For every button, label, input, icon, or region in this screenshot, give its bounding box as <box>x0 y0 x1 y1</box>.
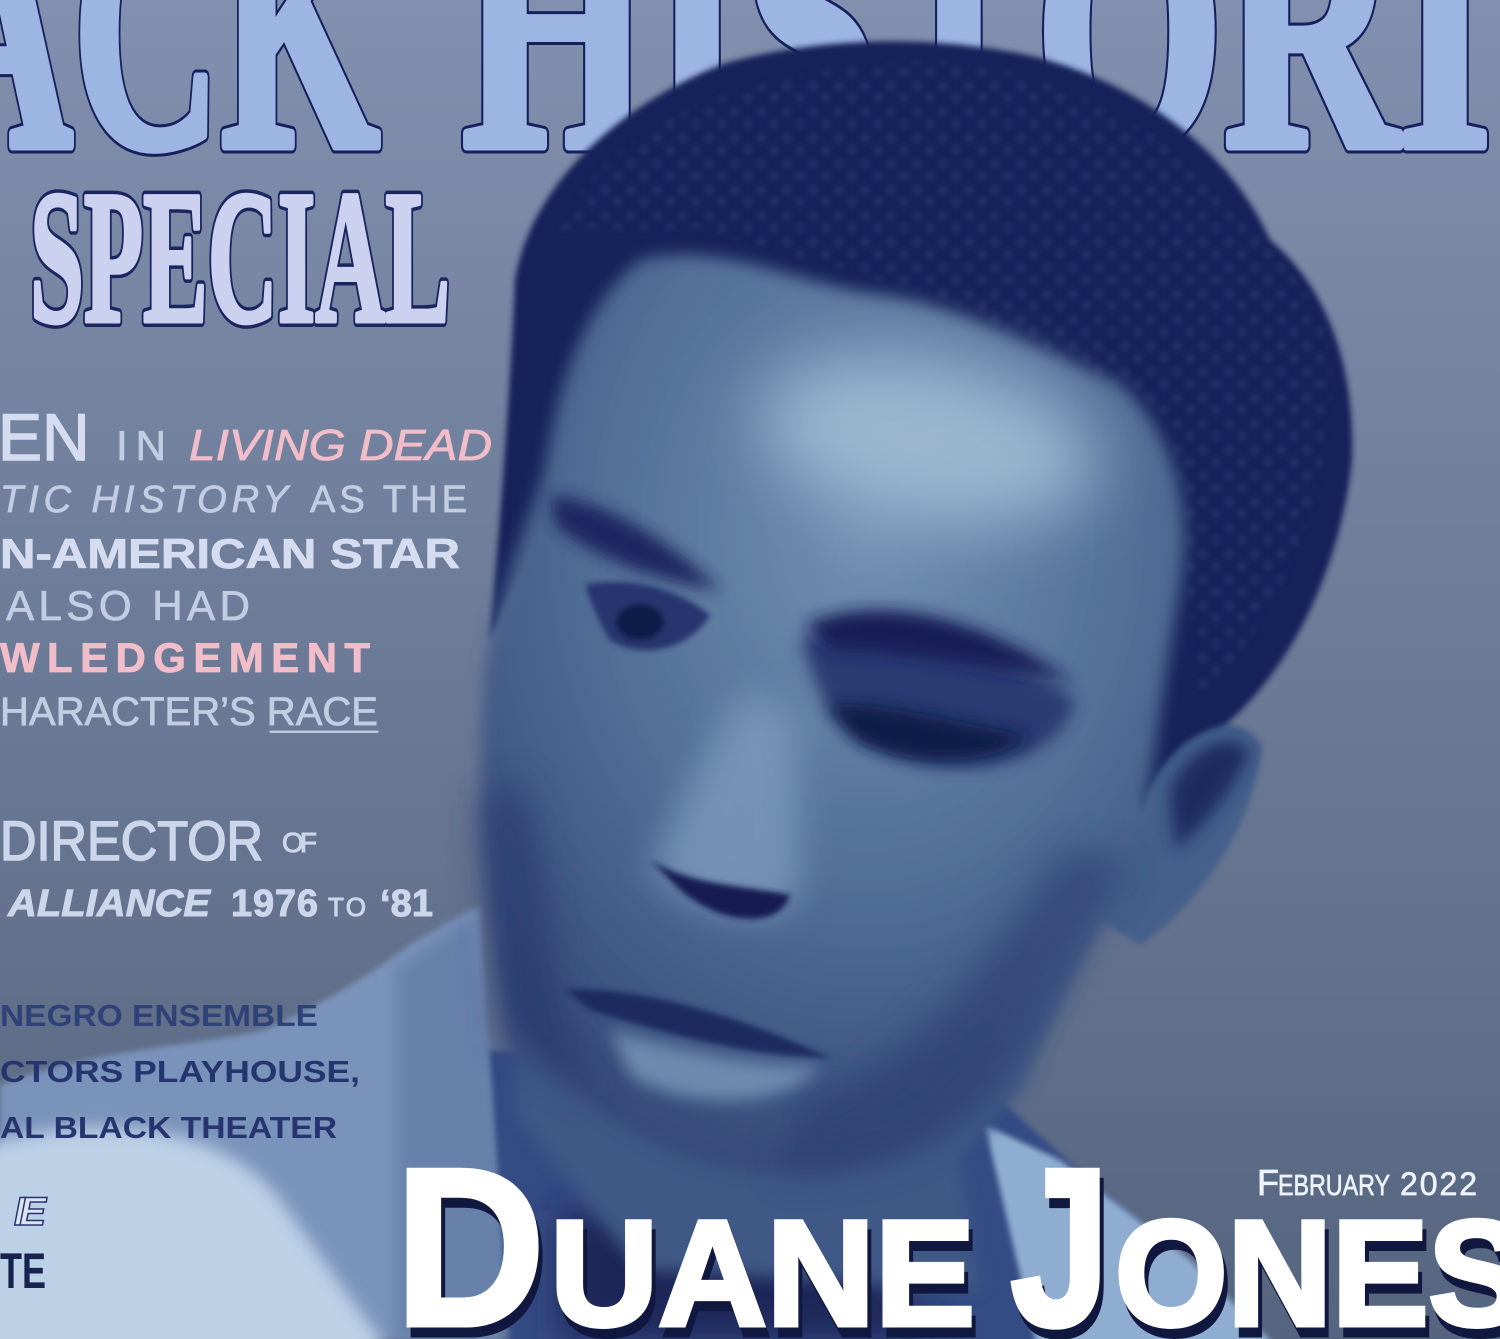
issue date: EBRUARY <box>1278 1170 1390 1202</box>
text block: theatre credits: AL BLACK THEATER <box>0 1110 337 1145</box>
nostrils <box>650 860 790 919</box>
neck <box>500 880 1120 1290</box>
right eye <box>585 582 710 650</box>
text block: Director: 1976 <box>231 883 318 925</box>
ear <box>1100 723 1262 945</box>
text block: theatre credits: NEGRO ENSEMBLE <box>0 998 318 1033</box>
hair <box>490 41 1352 810</box>
text block: Director <box>0 809 433 925</box>
issue date: F <box>1257 1162 1279 1203</box>
nose <box>650 690 800 914</box>
text block: Director: DIRECTOR <box>0 809 263 872</box>
text block: Living Dead <box>0 400 492 734</box>
left eye socket <box>800 634 1075 768</box>
subtitle: Special: SPECIAL <box>30 153 450 363</box>
left eye <box>825 704 1030 760</box>
jaw shadow <box>780 850 1130 1175</box>
text block: Living Dead: LIVING DEAD <box>189 421 492 470</box>
title: Black History <box>0 0 1492 222</box>
portrait: Duane Jones <box>480 41 1352 1290</box>
text block: Living Dead: TIC HISTORY <box>0 479 291 521</box>
cheek shadow <box>480 780 600 1100</box>
text block: theatre credits: IE <box>14 1190 47 1234</box>
text block: theatre credits: TE <box>0 1243 46 1299</box>
text block: theatre credits: CTORS PLAYHOUSE, <box>0 1054 360 1089</box>
face <box>481 255 1184 1175</box>
subtitle: Special <box>30 153 450 363</box>
lower lip <box>610 1030 820 1100</box>
right eyebrow <box>550 495 720 590</box>
text block: Living Dead: HARACTER’S RACE <box>0 690 378 734</box>
text block: Director: ‘81 <box>380 883 433 925</box>
mouth <box>565 990 830 1058</box>
left brow <box>805 610 1072 682</box>
forehead highlight <box>749 332 1111 548</box>
issue date <box>1257 1162 1477 1203</box>
text block: Director: OF <box>282 827 317 858</box>
text block: Living Dead: AS THE <box>310 479 467 521</box>
name: Duane Jones <box>395 1121 1500 1339</box>
text block: Living Dead: IN <box>116 422 166 469</box>
text block: Living Dead: WLEDGEMENT <box>0 634 370 681</box>
text block: Director: ALLIANCE <box>7 883 212 925</box>
text block: Living Dead: ALSO HAD <box>6 582 250 629</box>
text block: Living Dead: N-AMERICAN STAR <box>0 530 460 577</box>
inner ear shadow <box>1170 741 1250 850</box>
subtitle: Special: SPECIAL <box>30 153 450 363</box>
text block: theatre credits <box>0 998 360 1299</box>
shirt <box>0 905 1290 1339</box>
text block: Director: TO <box>328 892 366 922</box>
text block: Living Dead: EN <box>0 400 90 474</box>
issue date: 2022 <box>1400 1166 1477 1202</box>
